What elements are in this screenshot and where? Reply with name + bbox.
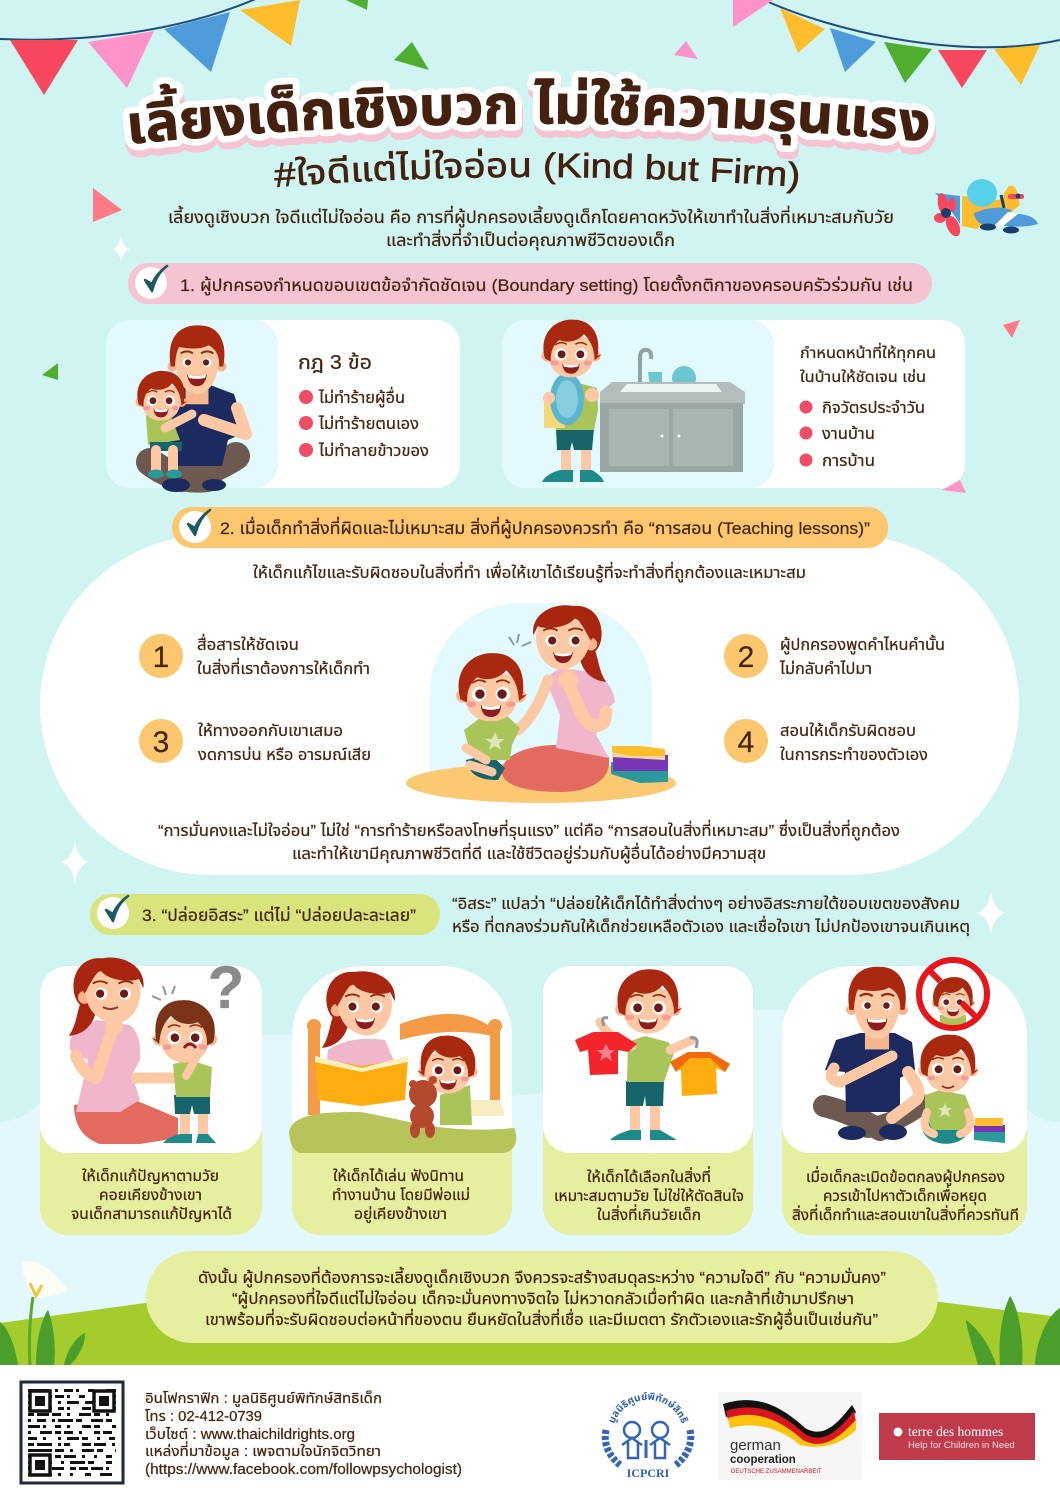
step 3: 3 [153,726,169,759]
logo: terre des hommes [879,1413,1035,1460]
contact info: แหล่งที่มาข้อมูล : เพจตามใจนักจิตวิทยา [145,1441,381,1460]
contact info: อินโฟกราฟิก : มูลนิธิศูนย์พิทักษ์สิทธิเด็ก [145,1391,382,1407]
plants right [966,1296,1060,1365]
duties list: การบ้าน [822,453,875,470]
illustration: mother and child on rug [406,603,676,803]
intro text: และทำสิ่งที่จำเป็นต่อคุณภาพชีวิตของเด็ก [386,228,675,251]
rules list: ไม่ทำลายข้าวของ [318,442,429,460]
title: เลี้ยงเด็กเชิงบวก ไม่ใช้ความรุนแรง [126,82,936,160]
firmness statement: “การมั่นคงและไม่ใจอ่อน” ไม่ใช่ “การทำร้ายหรือลงโทษที่รุนแรง” แต่คือ “การสอนในสิ่งที่เหมาะสม” ซึ่งเป็นสิ่งที่ถูกต้อง [158,819,900,840]
duties list: ในบ้านให้ชัดเจน เช่น [800,368,926,386]
title: เลี้ยงเด็กเชิงบวก ไม่ใช้ความรุนแรง [122,70,935,152]
panel: duties card [502,320,965,488]
card 2 caption: ให้เด็กได้เล่น ฟังนิทาน [333,1167,464,1185]
rules list: กฎ 3 ข้อ [298,351,372,374]
illustration: father and son [136,325,246,492]
card 2 caption: อยู่เคียงข้างเขา [354,1205,447,1223]
section 1 pill [128,263,932,304]
rules list: ไม่ทำร้ายผู้อื่น [318,386,405,407]
card 1 caption: ให้เด็กแก้ปัญหาตามวัย [82,1167,219,1185]
step 4: ในการกระทำของตัวเอง [780,747,928,764]
rules list [298,351,429,460]
logo: ICPCR: มูลนิธิศูนย์พิทักษ์สิทธิเด็ก [609,1392,689,1424]
step 1 [139,633,370,678]
logo: terre des hommes: terre des hommes [908,1424,1003,1439]
step 2: ผู้ปกครองพูดคำไหนคำนั้น [780,634,945,654]
card 3 caption: ในสิ่งที่เกินวัยเด็ก [597,1204,701,1224]
section 3 description [452,893,970,936]
conclusion panel: เขาพร้อมที่จะรับผิดชอบต่อหน้าที่ของตน ยืนหยัดในสิ่งที่เชื่อ และมีเมตตา รักตัวเองและรักผู้อื่นเป็นเช่นกัน” [205,1308,878,1329]
background: green hills [0,1278,1060,1365]
card 4 caption: สิ่งที่เด็กทำและสอนเขาในสิ่งที่ควรทันที [792,1204,1019,1224]
card 1 caption: จนเด็กสามารถแก้ปัญหาได้ [71,1205,232,1223]
subtitle: #ใจดีแต่ไม่ใจอ่อน (Kind but Firm) [274,148,798,194]
duties list [800,342,936,470]
section 2 heading: 2. เมื่อเด็กทำสิ่งที่ผิดและไม่เหมาะสม สิ่งที่ผู้ปกครองควรทำ คือ “การสอน (Teaching lessons)” [220,516,870,540]
step 1: สื่อสารให้ชัดเจน [197,633,299,654]
plants left [0,1261,85,1365]
logo: ICPCR: ICPCRI [627,1466,670,1480]
card 1 caption: คอยเคียงข้างเขา [99,1187,202,1204]
duties list: งานบ้าน [822,426,875,443]
illustration: bedtime story [289,971,516,1153]
logo: terre des hommes: Help for Children in Need [908,1440,1015,1451]
intro text: เลี้ยงดูเชิงบวก ใจดีแต่ไม่ใจอ่อน คือ การที่ผู้ปกครองเลี้ยงดูเด็กโดยคาดหวังให้เขาทำในสิ่งที่เหมาะสมกับวัย [168,205,894,229]
card 4 caption: ควรเข้าไปหาตัวเด็กเพื่อหยุด [823,1185,987,1205]
step 2: 2 [738,641,754,674]
logo: German Cooperation: DEUTSCHE ZUSAMMENARBEIT [731,1469,822,1475]
card 2 caption: ทำงานบ้าน โดยมีพ่อแม่ [332,1186,470,1204]
rules list: ไม่ทำร้ายตนเอง [318,415,419,433]
footer band [0,1365,1060,1500]
card 3 caption [554,1166,744,1224]
illustration: boy washing dishes [541,320,745,482]
step 1: 1 [153,641,169,674]
logo: German Cooperation: cooperation [730,1454,796,1466]
card 4 caption: เมื่อเด็กละเมิดข้อตกลงผู้ปกครอง [806,1166,1005,1186]
section 3 pill [90,894,440,935]
firmness statement: และทำให้เขามีคุณภาพชีวิตที่ดี และใช้ชีวิตอยู่ร่วมกับผู้อื่นได้อย่างมีความสุข [292,842,766,863]
confetti pink corner [942,480,966,493]
illustration: mother and thinking boy: ? [208,954,244,1021]
contact info: (https://www.facebook.com/followpsychologist) [145,1462,462,1478]
step 3: งดการบ่น หรือ อารมณ์เสีย [198,746,371,764]
step 4: สอนให้เด็กรับผิดชอบ [780,722,916,740]
card 1: solving problems [40,954,262,1235]
section 3 description: หรือ ที่ตกลงร่วมกันให้เด็กช่วยเหลือตัวเอง และเชื่อใจเขา ไม่ปกป้องเขาจนเกินเหตุ [452,915,970,936]
illustration: father pointing, child and warning sign [824,957,1005,1144]
icon: check [97,896,129,929]
step 2: ไม่กลับคำไปมา [779,660,872,678]
QR code [21,1382,123,1483]
step 3 [139,719,371,764]
logo: ICPCR [602,1392,694,1480]
card 2 caption [332,1167,470,1223]
section 3 heading: 3. “ปล่อยอิสระ” แต่ไม่ “ปล่อยปละละเลย” [142,906,416,925]
sparkles [61,235,1005,935]
duties list: กิจวัตรประจำวัน [822,400,925,417]
illustration: mother and thinking boy [69,954,244,1144]
confetti triangles [42,0,1020,380]
bunting left [0,0,300,95]
step 2 [724,634,945,678]
duties list: กำหนดหน้าที่ให้ทุกคน [800,342,936,362]
icon: check [179,510,211,543]
card 4 caption [792,1166,1019,1224]
icon: check [135,266,167,299]
step 3: ให้ทางออกกับเขาเสมอ [198,723,343,740]
card 2: playing and reading [289,966,516,1235]
firmness statement [158,819,900,863]
card 3 caption: ให้เด็กได้เลือกในสิ่งที่ [587,1166,711,1186]
logo: German Cooperation [718,1392,862,1480]
card 3 caption: เหมาะสมตามวัย ไม่ใช่ให้ตัดสินใจ [554,1187,744,1205]
conclusion panel [146,1251,938,1343]
background: pale cloud band [0,1010,1060,1365]
contact info: เว็บไซต์ : www.thaichildrights.org [145,1427,355,1443]
step 1: ในสิ่งที่เราต้องการให้เด็กทำ [197,657,370,678]
conclusion panel: “ผู้ปกครองที่ใจดีแต่ไม่ใจอ่อน เด็กจะมั่นคงทางจิตใจ ไม่หวาดกลัวเมื่อทำผิด และกล้าที่เข้ามาปรึกษา [232,1287,854,1308]
card 3: choosing clothes [543,966,753,1235]
teaching intro: ให้เด็กแก้ไขและรับผิดชอบในสิ่งที่ทำ เพื่อให้เขาได้เรียนรู้ที่จะทำสิ่งที่ถูกต้องและเหมาะสม [253,561,806,582]
panel: three rules card [106,320,460,492]
card 4: stopping misbehaviour [782,957,1027,1235]
bunting right [733,0,1060,88]
illustration: boy holding shirts [575,969,730,1140]
section 2 pill [172,507,888,548]
card 1 caption [71,1167,232,1223]
title: เลี้ยงเด็กเชิงบวก ไม่ใช้ความรุนแรง [129,77,928,146]
step 4 [724,719,928,764]
contact info [145,1391,462,1478]
section 3 description: “อิสระ” แปลว่า “ปล่อยให้เด็กได้ทำสิ่งต่างๆ อย่างอิสระภายใต้ขอบเขตของสังคม [452,893,960,913]
step 4: 4 [738,726,754,759]
panel: teaching lessons [40,535,1019,875]
icon: toy plane [934,179,1038,239]
contact info: โทร : 02-412-0739 [145,1409,262,1425]
logo: German Cooperation: german [730,1437,781,1454]
intro text [168,205,894,251]
section 1 heading: 1. ผู้ปกครองกำหนดขอบเขตข้อจำกัดชัดเจน (Boundary setting) โดยตั้งกติกาของครอบครัวร่วมกัน เช่น [180,274,913,297]
conclusion panel: ดังนั้น ผู้ปกครองที่ต้องการจะเลี้ยงดูเด็กเชิงบวก จึงควรจะสร้างสมดุลระหว่าง “ความใจดี” กับ “ความมั่นคง” [198,1266,886,1287]
